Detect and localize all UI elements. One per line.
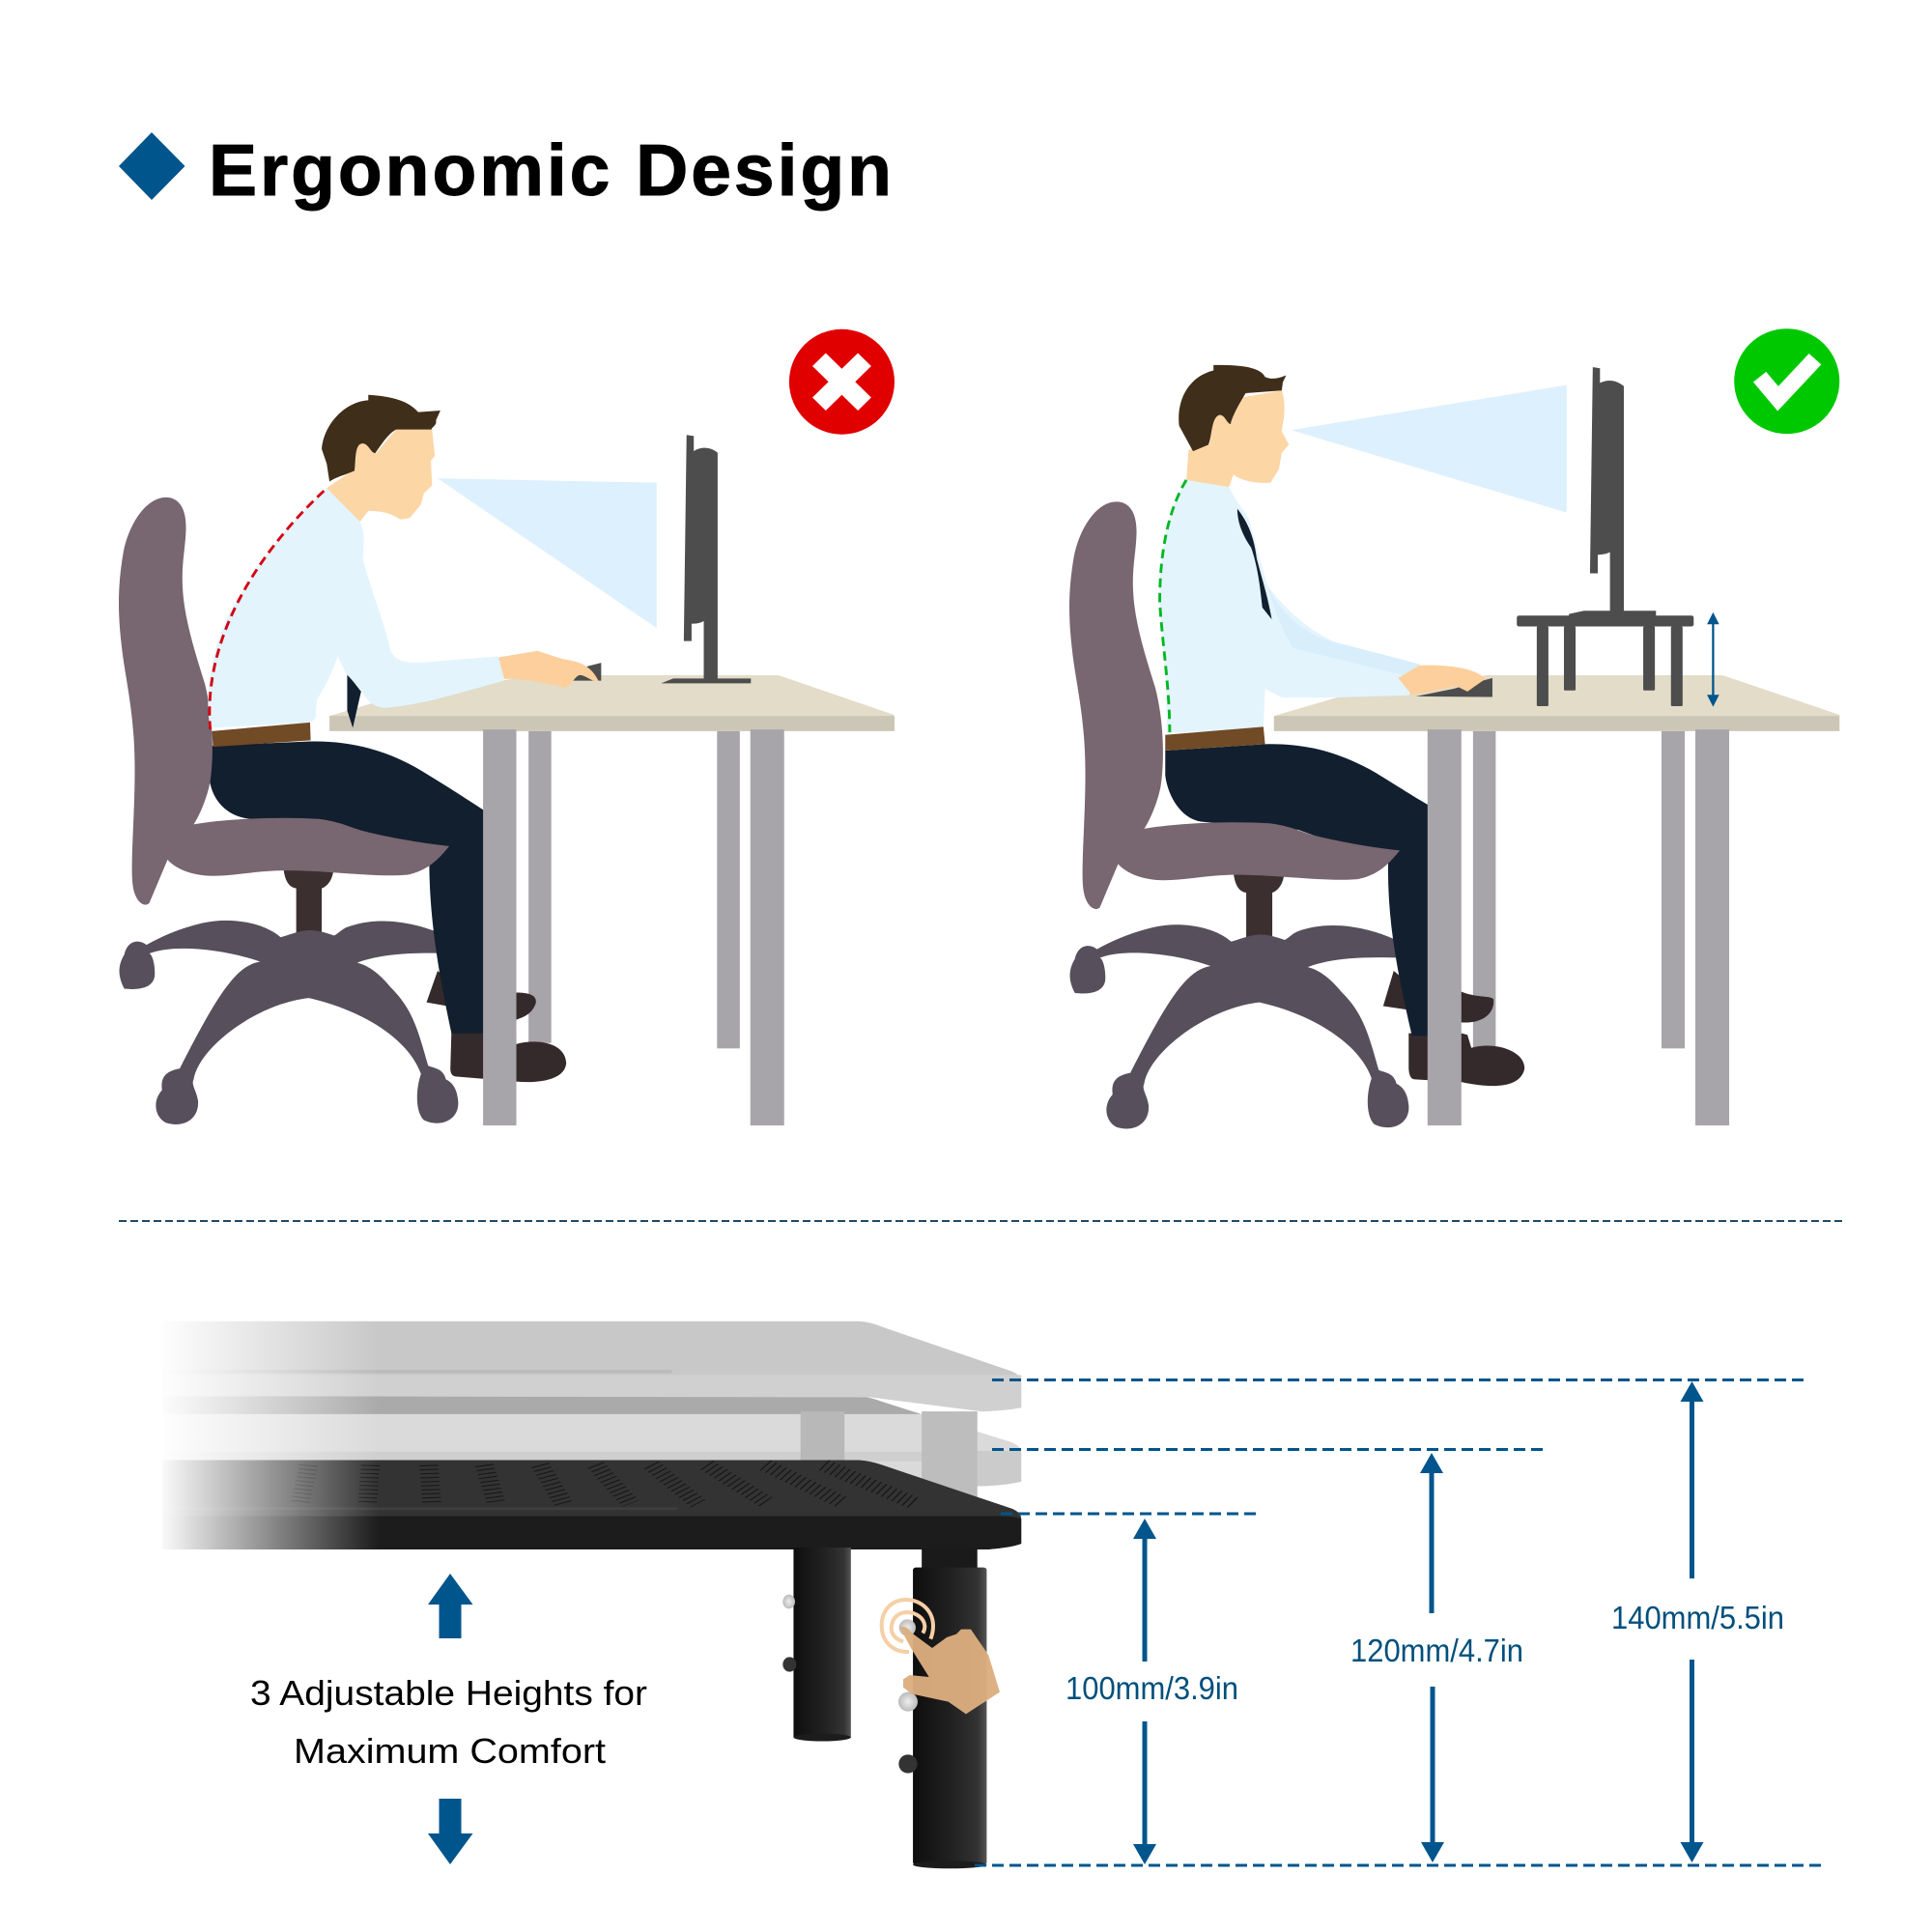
spine line: straight: [1160, 480, 1186, 732]
caption line 1: 3 Adjustable Heights for: [250, 1673, 647, 1713]
back leg: [793, 1548, 851, 1742]
spine line: curved: [210, 491, 324, 729]
label 120mm: 120mm/4.7in: [1350, 1633, 1523, 1668]
perforations: [300, 1465, 915, 1503]
ghost board: middle height: [162, 1396, 1021, 1486]
chair seat and back: [1069, 501, 1400, 909]
ghost board: top height: [162, 1321, 1021, 1411]
chair seat and back: [119, 497, 449, 905]
shoes: [427, 971, 566, 1082]
chair base: [1070, 924, 1408, 1128]
desk back legs: [528, 731, 740, 1048]
trousers: [210, 741, 485, 1034]
label 140mm: 140mm/5.5in: [1611, 1600, 1784, 1635]
caption: [250, 1673, 647, 1771]
hand: [1398, 666, 1485, 696]
trousers: [1165, 744, 1430, 1036]
height guide lines: [975, 1379, 1822, 1865]
monitor: [1590, 367, 1624, 614]
dimension: 100mm: [1065, 1519, 1238, 1864]
pegs and hand: [782, 1595, 1000, 1774]
belt: [212, 723, 311, 747]
label 100mm: 100mm/3.9in: [1065, 1670, 1238, 1706]
monitor stand: [1517, 611, 1693, 706]
ghost legs: [801, 1411, 978, 1499]
keyboard: [1416, 678, 1492, 696]
chair column: [1234, 872, 1285, 937]
arrow up: [428, 1574, 473, 1638]
sight cone: [1292, 385, 1567, 513]
title: Ergonomic Design: [209, 129, 892, 211]
height arrow: [1707, 612, 1719, 707]
necktie: [1237, 509, 1271, 619]
mouse: [568, 663, 601, 681]
rings: [882, 1600, 933, 1652]
caption line 2: Maximum Comfort: [294, 1731, 606, 1771]
desk top: [1274, 675, 1839, 731]
title icon: diamond: [119, 132, 185, 200]
monitor riser illustration: [156, 1318, 1021, 1868]
sleeve shade: [1267, 585, 1420, 678]
pointing hand: [900, 1627, 1000, 1714]
desk front legs: [483, 729, 784, 1125]
chair base: [120, 921, 458, 1124]
shirt: [208, 488, 504, 727]
shirt: [1159, 480, 1420, 733]
head and neck: [327, 430, 435, 522]
front leg: [913, 1548, 986, 1868]
arrow down: [428, 1799, 473, 1864]
shoes: [1383, 971, 1524, 1086]
panel: correct posture: [1069, 328, 1839, 1128]
white fade on left side: [156, 1318, 379, 1552]
badge: incorrect: [789, 329, 895, 435]
monitor: [661, 435, 751, 683]
head and neck: [1186, 390, 1289, 487]
panel: incorrect posture: [119, 329, 895, 1125]
belt: [1165, 726, 1265, 751]
badge: correct: [1734, 328, 1839, 434]
hand: [498, 651, 598, 688]
desk back legs: [1473, 731, 1685, 1048]
desk front legs: [1428, 729, 1729, 1125]
black board: [162, 1461, 1021, 1549]
chair column: [283, 867, 334, 933]
hair: [1179, 365, 1286, 451]
adjustment pegs: [782, 1595, 918, 1774]
dimension: 120mm: [1350, 1453, 1523, 1862]
necktie: [347, 557, 365, 727]
divider: [119, 1220, 1844, 1222]
sight cone: [438, 478, 657, 628]
desk top: [329, 675, 895, 731]
hair: [322, 395, 440, 482]
dimension: 140mm: [1611, 1381, 1784, 1862]
